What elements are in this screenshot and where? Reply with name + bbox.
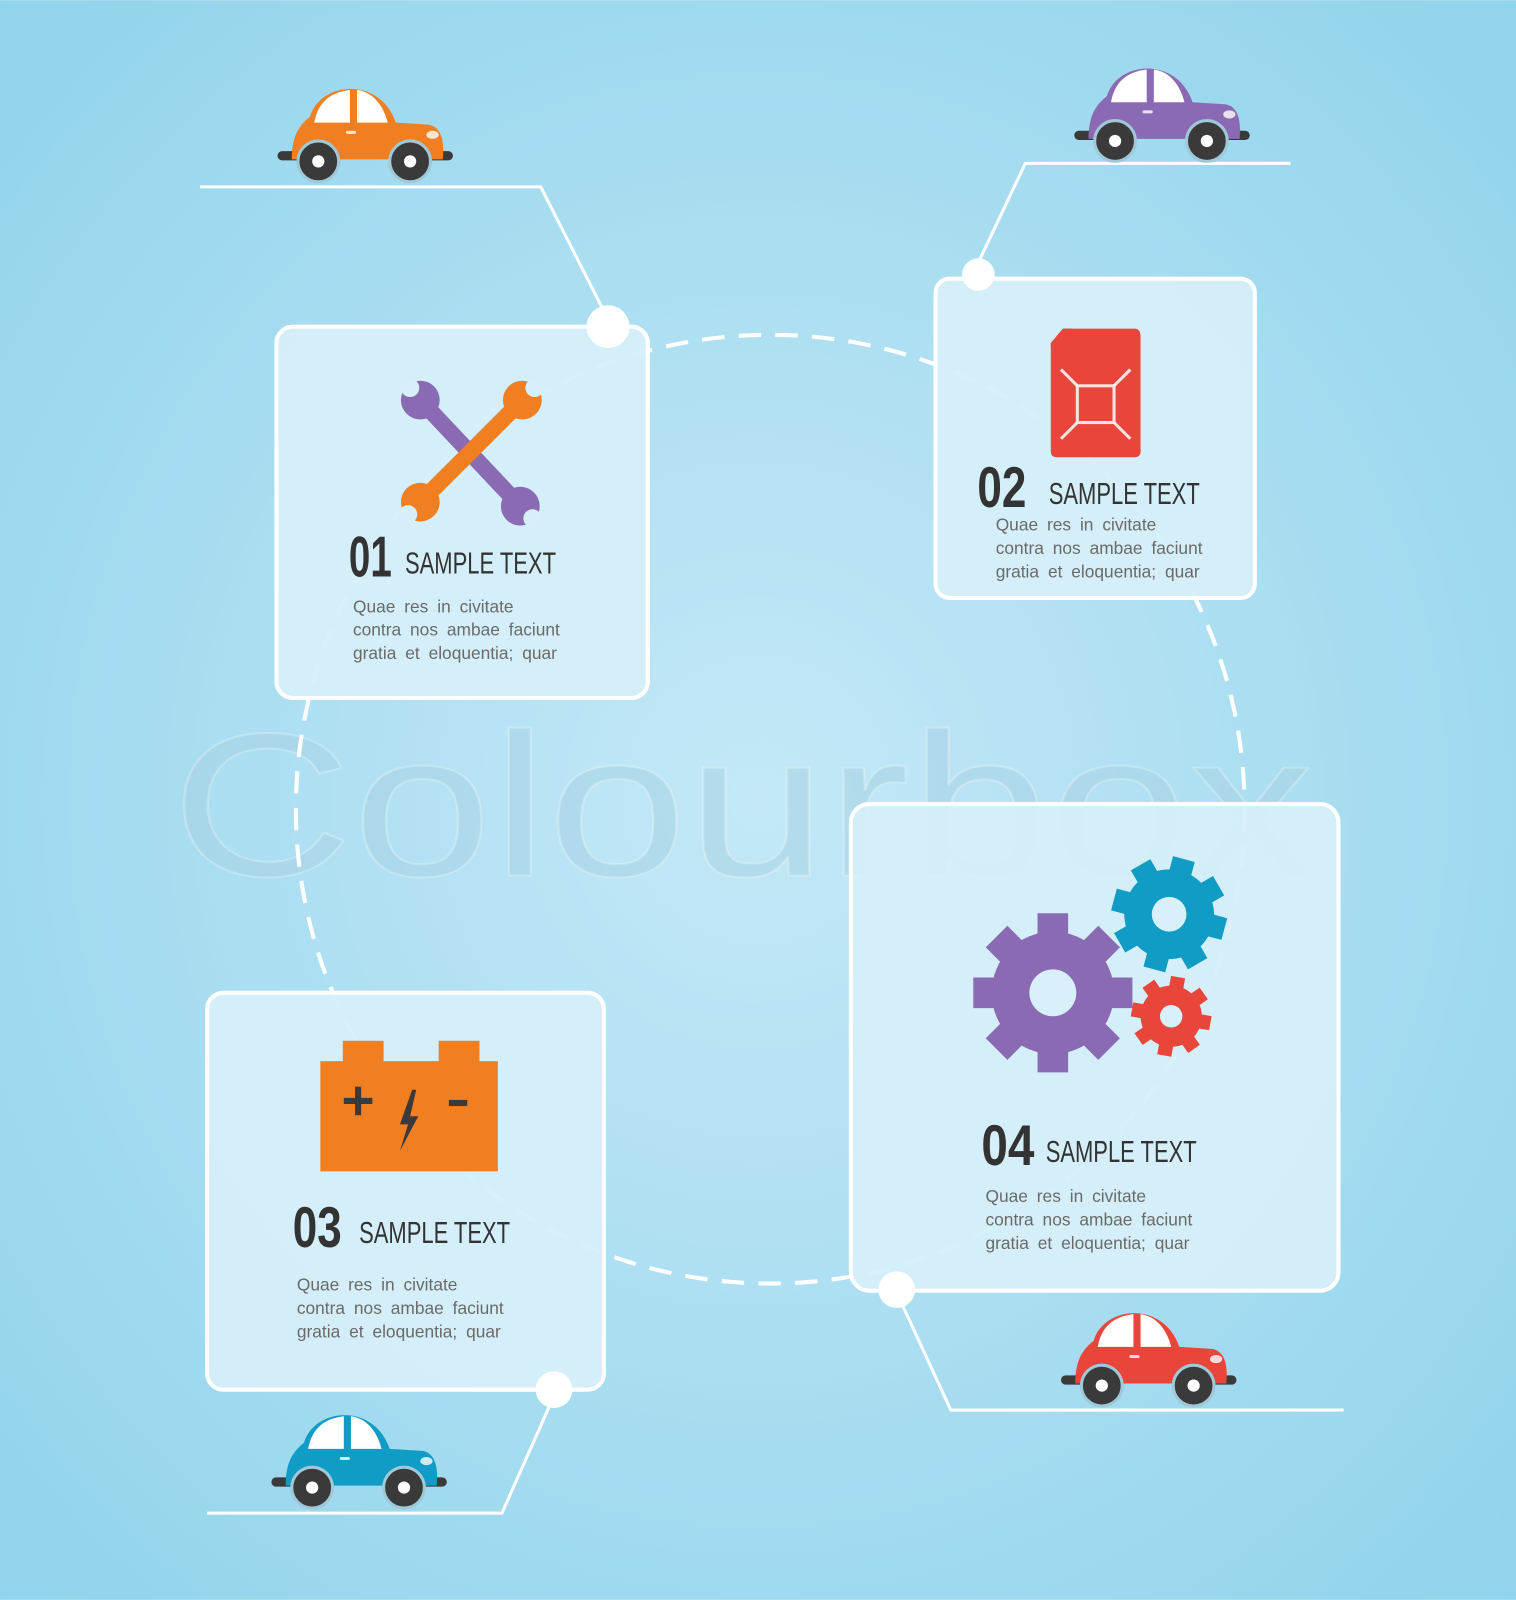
text block 04 (986, 1186, 1193, 1253)
panel: 01: SAMPLE TEXT (405, 547, 556, 581)
icon: purple car (1074, 69, 1250, 161)
text block 04: gratia et eloquentia; quar (986, 1233, 1190, 1253)
icon: gears (973, 844, 1239, 1072)
panel: 04: SAMPLE TEXT (1046, 1135, 1197, 1169)
heading 01: 01 (349, 526, 392, 590)
text block 04: contra nos ambae faciunt (986, 1209, 1193, 1229)
text block 02: contra nos ambae faciunt (996, 538, 1203, 558)
heading 02: 02 (977, 456, 1026, 520)
text block 02 (996, 515, 1203, 582)
heading 04: 04 (981, 1114, 1035, 1178)
text block 01: gratia et eloquentia; quar (353, 643, 557, 663)
text block 02: gratia et eloquentia; quar (996, 562, 1200, 582)
icon: orange car (277, 89, 453, 182)
icon: jerry can (1051, 329, 1141, 457)
icon: battery (320, 1041, 498, 1171)
connector lines (200, 163, 1344, 1513)
panel: 01 (276, 327, 648, 698)
panel: 03: SAMPLE TEXT (359, 1216, 510, 1250)
text block 03 (297, 1275, 504, 1342)
panel: 04 (851, 804, 1338, 1291)
watermark: Colourbox (171, 691, 1314, 919)
icon: wrenches (399, 379, 544, 528)
text block 03: contra nos ambae faciunt (297, 1298, 504, 1318)
text block 02: Quae res in civitate (996, 515, 1156, 535)
icon: red car (1061, 1313, 1236, 1406)
icon: blue car (271, 1415, 447, 1508)
panel: 03 (207, 993, 604, 1390)
text block 01 (353, 596, 560, 663)
dashed circle connector (296, 335, 1245, 1284)
text block 01: Quae res in civitate (353, 596, 514, 616)
connector dots (536, 258, 995, 1408)
panel: 02: SAMPLE TEXT (1049, 477, 1200, 511)
text block 03: gratia et eloquentia; quar (297, 1322, 501, 1342)
panel: 02 (936, 279, 1255, 598)
text block 03: Quae res in civitate (297, 1275, 457, 1295)
heading 03: 03 (293, 1196, 342, 1260)
text block 04: Quae res in civitate (986, 1186, 1146, 1206)
text block 01: contra nos ambae faciunt (353, 620, 560, 640)
